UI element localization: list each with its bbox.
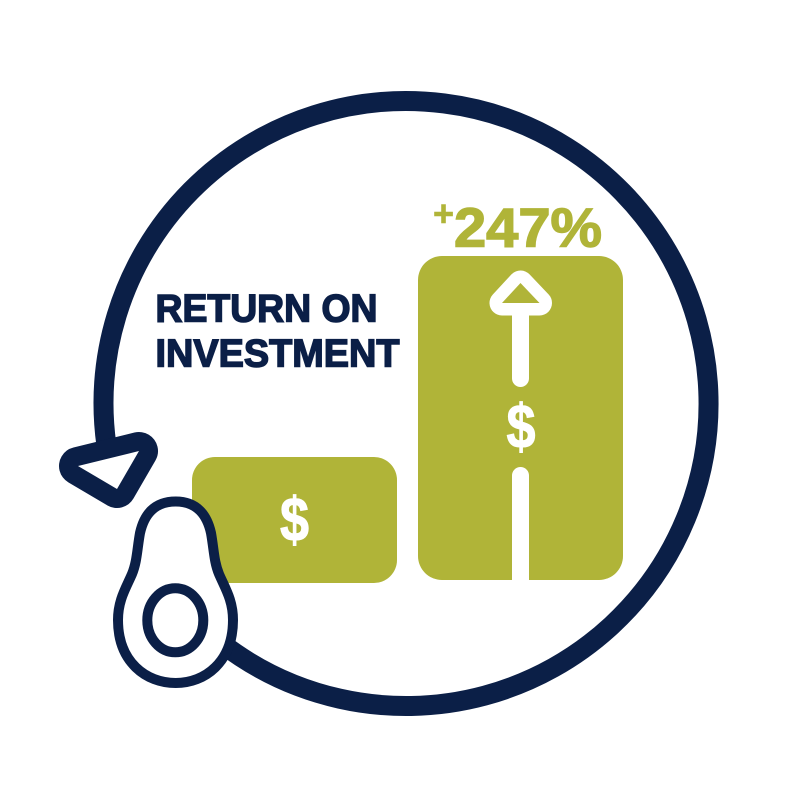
arrow up in tall bar	[502, 283, 540, 378]
heading: return on investment	[156, 288, 400, 376]
circular arrow: ring	[104, 101, 709, 706]
heading: return on investment: INVESTMENT	[156, 332, 400, 376]
avocado pit	[147, 588, 203, 652]
stat: +247%: 247%	[454, 196, 602, 258]
tall bar: after	[418, 256, 623, 580]
heading: return on investment: RETURN ON	[156, 288, 378, 330]
icon: avocado	[118, 502, 233, 683]
stat: +247%: +	[433, 193, 454, 234]
dollar sign: small bar: $	[280, 486, 309, 555]
lower arrow shaft	[512, 476, 529, 580]
dollar sign: tall bar: $	[506, 393, 536, 462]
circular arrow: head	[78, 451, 139, 489]
small bar: before	[192, 457, 397, 583]
